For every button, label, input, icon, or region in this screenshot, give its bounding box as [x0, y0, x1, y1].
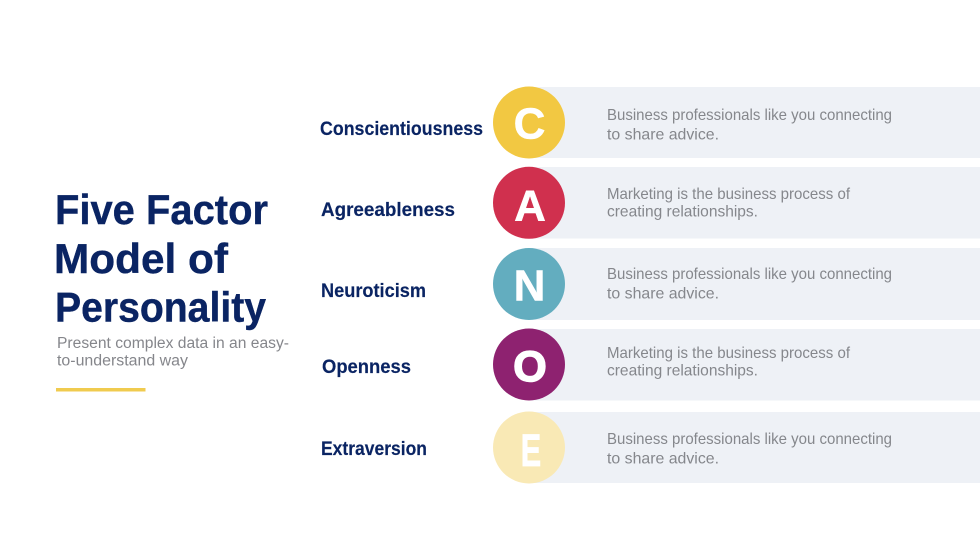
title: [54, 186, 268, 330]
title: Personality: [55, 284, 266, 330]
description panel: [530, 87, 980, 158]
icon: letter O circle: O: [513, 343, 547, 391]
icon: letter C circle: C: [514, 100, 545, 148]
description: Marketing is the business process of: [607, 186, 851, 203]
description: Business professionals like you connecting: [607, 266, 892, 283]
description: [607, 107, 892, 144]
icon: letter E circle: [493, 412, 565, 484]
title: Five Factor: [55, 186, 268, 233]
description: creating relationships.: [607, 204, 758, 220]
description panel: [530, 329, 980, 400]
icon: letter O circle: [493, 328, 565, 400]
subtitle: Present complex data in an easy-: [57, 335, 289, 352]
row: conscientiousness: [320, 86, 980, 158]
description: creating relationships.: [607, 362, 758, 380]
yellow accent line: [56, 388, 146, 392]
icon: letter A circle: [493, 167, 565, 239]
description: Business professionals like you connecting: [607, 431, 892, 448]
icon: letter A circle: A: [514, 182, 546, 230]
description: to share advice.: [607, 450, 719, 468]
description: to share advice.: [607, 126, 719, 144]
description panel: [530, 248, 980, 320]
subtitle: [57, 335, 289, 370]
description: [607, 186, 851, 220]
description: Marketing is the business process of: [607, 345, 851, 362]
label: Conscientiousness: [320, 118, 483, 140]
label: Agreeableness: [321, 199, 455, 221]
description: [607, 345, 851, 380]
description: [607, 431, 892, 468]
description: to share advice.: [607, 286, 719, 302]
title: Model of: [54, 235, 228, 282]
row: openness: [322, 328, 980, 400]
description: Business professionals like you connecting: [607, 107, 892, 124]
row: extraversion: [321, 412, 980, 484]
icon: letter N circle: N: [514, 262, 545, 310]
description panel: [530, 412, 980, 483]
row: neuroticism: [321, 248, 980, 320]
description: [607, 266, 892, 302]
label: Extraversion: [321, 438, 427, 460]
label: Openness: [322, 356, 411, 378]
description panel: [530, 167, 980, 238]
icon: letter E circle: E: [521, 426, 541, 477]
label: Neuroticism: [321, 280, 426, 302]
subtitle: to-understand way: [57, 352, 188, 370]
icon: letter C circle: [493, 86, 565, 158]
row: agreeableness: [321, 167, 980, 239]
icon: letter N circle: [493, 248, 565, 320]
